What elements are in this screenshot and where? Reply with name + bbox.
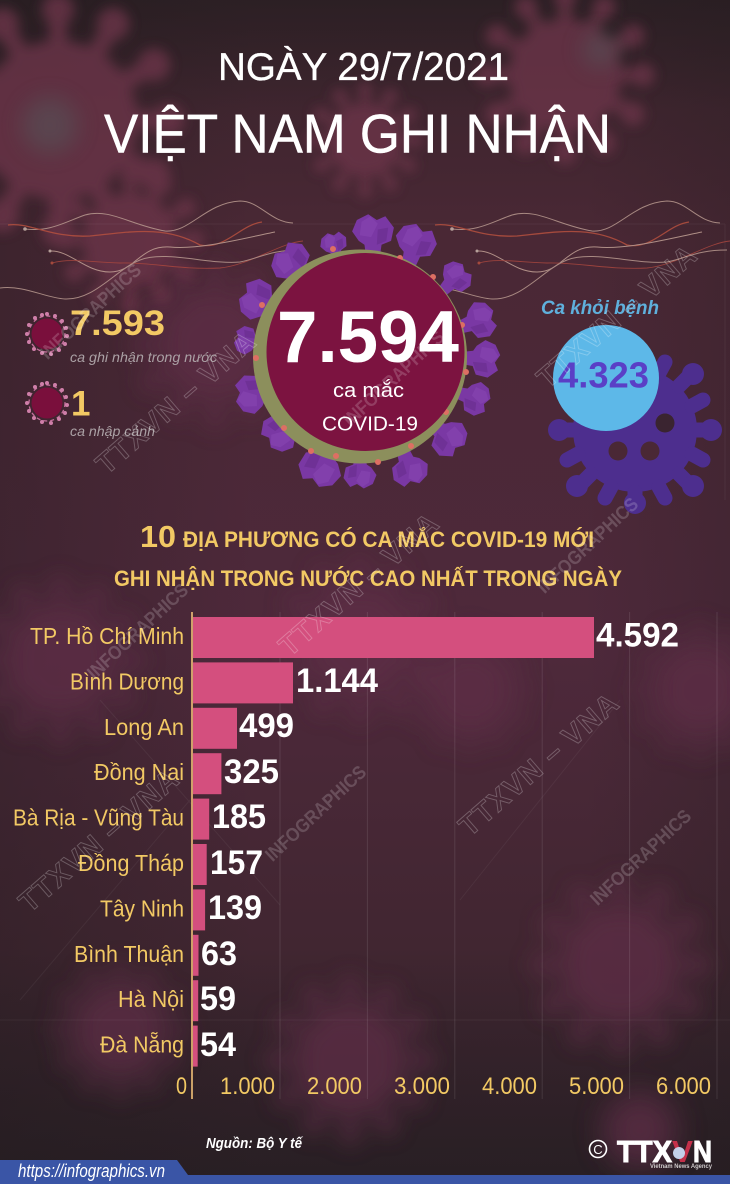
decorative waves left bbox=[0, 201, 303, 299]
category labels: Long An bbox=[104, 714, 184, 740]
TTX letters: TTX bbox=[617, 1134, 672, 1169]
category labels: Đồng Nai bbox=[94, 759, 184, 785]
x axis labels bbox=[176, 1073, 711, 1100]
V letter: V bbox=[672, 1134, 693, 1169]
x axis labels: 5.000 bbox=[569, 1073, 624, 1100]
recovered value: 4.323 bbox=[558, 354, 649, 396]
virus spikes bbox=[232, 214, 501, 493]
ring dots bbox=[256, 249, 466, 462]
axis line bbox=[191, 612, 193, 1099]
category labels: Bà Rịa - Vũng Tàu bbox=[13, 805, 184, 831]
category labels: Tây Ninh bbox=[100, 895, 184, 921]
watermark INFOGRAPHICS: INFOGRAPHICS bbox=[340, 327, 449, 431]
watermark INFOGRAPHICS: INFOGRAPHICS bbox=[534, 494, 643, 598]
watermark TTXVN - VNA bbox=[13, 239, 703, 919]
value 1: 1 bbox=[71, 384, 90, 424]
value labels: 4.592 bbox=[596, 616, 679, 654]
chart heading bbox=[114, 519, 622, 591]
value labels: 59 bbox=[200, 980, 236, 1018]
watermark TTXVN - VNA: TTXVN – VNA bbox=[90, 325, 262, 481]
heading number: 10 bbox=[140, 519, 176, 554]
stat: domestic cases bbox=[27, 304, 217, 365]
value labels: 139 bbox=[208, 889, 262, 927]
category labels: TP. Hồ Chí Minh bbox=[30, 623, 184, 649]
caption imported: ca nhập cảnh bbox=[70, 423, 155, 439]
bar chart bbox=[13, 612, 717, 1100]
watermark TTXVN - VNA: TTXVN – VNA bbox=[273, 507, 445, 663]
value labels: 63 bbox=[201, 935, 237, 973]
watermarks bbox=[13, 239, 703, 919]
watermark INFOGRAPHICS: INFOGRAPHICS bbox=[587, 806, 696, 910]
value labels: 1.144 bbox=[296, 662, 378, 700]
watermark TTXVN - VNA: TTXVN – VNA bbox=[453, 687, 625, 843]
main virus with total bbox=[232, 214, 501, 493]
value labels: 54 bbox=[200, 1026, 236, 1064]
watermark TTXVN - VNA: TTXVN – VNA bbox=[531, 239, 703, 395]
recovered label: Ca khỏi bệnh bbox=[541, 298, 659, 319]
decorative waves right bbox=[427, 201, 730, 299]
globe bbox=[673, 1147, 685, 1159]
N letter: N bbox=[693, 1134, 712, 1169]
caption domestic: ca ghi nhận trong nước bbox=[70, 349, 217, 365]
value 7.593: 7.593 bbox=[70, 304, 165, 343]
total caption line 1: ca mắc bbox=[333, 379, 404, 402]
category labels bbox=[13, 623, 184, 1058]
x axis labels: 2.000 bbox=[307, 1073, 362, 1100]
footer shape bbox=[0, 1160, 730, 1184]
agency name: Vietnam News Agency bbox=[650, 1163, 712, 1170]
x axis labels: 1.000 bbox=[220, 1073, 275, 1100]
footer bar bbox=[0, 1160, 730, 1184]
x axis labels: 3.000 bbox=[394, 1073, 450, 1100]
watermark INFOGRAPHICS: INFOGRAPHICS bbox=[37, 260, 146, 364]
copyright mark: C bbox=[593, 1142, 603, 1157]
watermark INFOGRAPHICS: INFOGRAPHICS bbox=[262, 762, 371, 866]
recovered circle bbox=[553, 325, 659, 431]
title: date: NGÀY 29/7/2021 bbox=[218, 46, 509, 89]
value labels: 185 bbox=[212, 798, 266, 836]
x axis labels: 4.000 bbox=[482, 1073, 537, 1100]
category labels: Bình Thuận bbox=[74, 941, 184, 967]
category labels: Hà Nội bbox=[118, 986, 184, 1012]
title: headline: VIỆT NAM GHI NHẬN bbox=[104, 102, 611, 164]
icon: small virus bbox=[27, 314, 67, 354]
logo: TTXVN bbox=[590, 1134, 712, 1170]
source: Nguồn: Bộ Y tế bbox=[206, 1135, 303, 1152]
category labels: Bình Dương bbox=[70, 668, 184, 694]
watermark INFOGRAPHICS bbox=[37, 260, 696, 910]
value labels: 499 bbox=[239, 707, 294, 745]
stat: imported cases bbox=[27, 383, 155, 439]
bars bbox=[193, 617, 594, 1067]
virus ring bbox=[253, 250, 467, 464]
x axis labels: 6.000 bbox=[656, 1073, 711, 1100]
grid lines bbox=[280, 612, 717, 1099]
virus core bbox=[266, 253, 464, 451]
category labels: Đà Nẵng bbox=[100, 1031, 184, 1058]
heading line 1: ĐỊA PHƯƠNG CÓ CA MẮC COVID-19 MỚI bbox=[183, 527, 594, 552]
icon: blue virus bbox=[559, 355, 711, 503]
category labels: Đồng Tháp bbox=[78, 850, 184, 876]
icon: small virus imported bbox=[27, 383, 67, 423]
value labels: 157 bbox=[210, 844, 263, 882]
watermark INFOGRAPHICS: INFOGRAPHICS bbox=[84, 580, 193, 684]
value labels: 325 bbox=[224, 753, 279, 791]
heading line 2: GHI NHẬN TRONG NƯỚC CAO NHẤT TRONG NGÀY bbox=[114, 566, 622, 591]
total value: 7.594 bbox=[277, 297, 459, 378]
total caption line 2: COVID-19 bbox=[322, 414, 418, 436]
value labels bbox=[200, 616, 679, 1064]
watermark TTXVN - VNA: TTXVN – VNA bbox=[13, 763, 185, 919]
x axis labels: 0 bbox=[176, 1073, 187, 1100]
website url: https://infographics.vn bbox=[18, 1161, 165, 1181]
recovered block bbox=[541, 298, 711, 503]
